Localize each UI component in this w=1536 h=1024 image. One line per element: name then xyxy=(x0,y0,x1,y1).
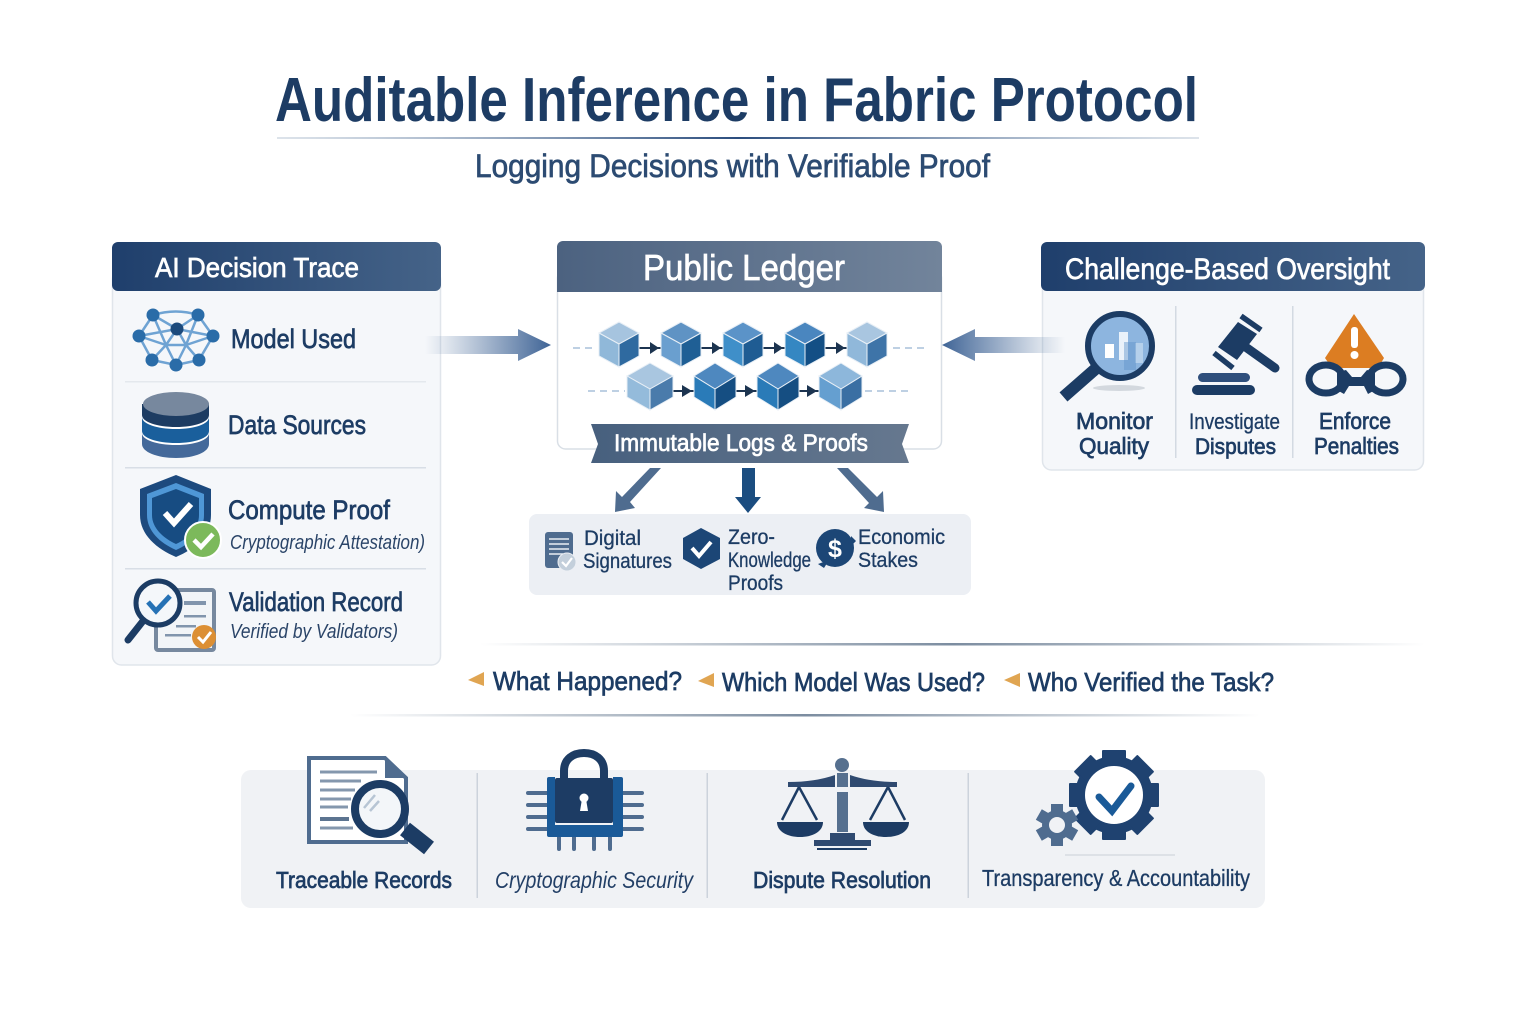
chain: blocks row two xyxy=(588,363,912,410)
panel: Challenge-Based Oversight xyxy=(1041,242,1425,470)
icon: zero-knowledge hexagon xyxy=(683,528,720,569)
label: Compute Proof: Compute Proof xyxy=(228,495,390,525)
icon: question marker one xyxy=(468,672,484,686)
banner: Immutable Logs & Proofs xyxy=(591,424,909,463)
label: Zero-Knowledge Proofs: Zero- xyxy=(728,526,775,549)
label: Enforce Penalties: Penalties xyxy=(1314,433,1399,459)
label: Economic Stakes: Stakes xyxy=(858,549,918,572)
icon: question marker three xyxy=(1004,673,1020,687)
panel: proof methods xyxy=(529,514,971,595)
icon: traceable records xyxy=(309,756,429,848)
icon: gears with check xyxy=(1036,751,1175,856)
icon: neural network xyxy=(132,308,220,372)
questions row xyxy=(468,666,1274,697)
arrow: ledger to economic stakes xyxy=(837,468,884,512)
label: Monitor Quality: Monitor xyxy=(1076,408,1153,434)
label: Investigate Disputes: Disputes xyxy=(1195,434,1276,459)
label: Zero-Knowledge Proofs: Knowledge xyxy=(728,549,811,572)
label: Monitor Quality: Quality xyxy=(1079,433,1149,459)
heading: AI Decision Trace xyxy=(112,242,441,291)
note: Verified by Validators: Verified by Validators) xyxy=(230,621,398,643)
subtitle: Logging Decisions with Verifiable Proof xyxy=(475,148,990,184)
label: Transparency & Accountability: Transparency & Accountability xyxy=(982,865,1250,891)
heading: Public Ledger: Public Ledger xyxy=(643,247,845,288)
arrow: trace to ledger xyxy=(425,329,551,361)
label: Digital Signatures: Digital xyxy=(584,527,641,550)
panel: Public Ledger xyxy=(557,241,942,463)
icon: database xyxy=(142,392,209,458)
icon: validation record xyxy=(128,581,216,650)
label: Data Sources: Data Sources xyxy=(228,410,366,440)
note: Cryptographic Attestation: Cryptographic Attestation) xyxy=(230,532,425,554)
arrow: oversight to ledger xyxy=(942,329,1065,361)
icon: shield with check xyxy=(140,475,221,558)
icon: cryptographic chip lock xyxy=(528,753,642,849)
question: Which Model Was Used: Which Model Was Used? xyxy=(722,667,985,697)
title: Auditable Inference in Fabric Protocol xyxy=(275,66,1198,135)
label: Investigate Disputes: Investigate xyxy=(1189,409,1280,434)
label: Economic Stakes: Economic xyxy=(858,526,945,549)
label: Validation Record: Validation Record xyxy=(229,587,403,617)
heading: Public Ledger xyxy=(557,241,942,292)
label: Digital Signatures: Signatures xyxy=(583,550,672,573)
label: Dispute Resolution: Dispute Resolution xyxy=(753,867,931,893)
heading: Challenge-Based Oversight xyxy=(1041,242,1425,291)
label: Zero-Knowledge Proofs: Proofs xyxy=(728,572,783,595)
chain: blocks row one xyxy=(573,322,925,367)
icon: question marker two xyxy=(698,673,714,687)
heading: Challenge-Based Oversight: Challenge-Based Oversight xyxy=(1065,253,1391,286)
label: Model Used: Model Used xyxy=(231,324,356,354)
label: Traceable Records: Traceable Records xyxy=(276,867,452,893)
banner: Immutable Logs & Proofs: Immutable Logs & Proofs xyxy=(614,430,868,457)
icon: digital signature document xyxy=(545,532,576,571)
icon: scales of justice xyxy=(777,758,909,850)
icon: economic stakes coin xyxy=(816,529,856,568)
icon: warning and handcuffs xyxy=(1309,314,1403,394)
icon: monitor magnifier xyxy=(1068,314,1152,393)
arrow: ledger to zero-knowledge proofs xyxy=(735,468,761,513)
icon: economic stakes coin: $ xyxy=(828,535,842,563)
icon: gavel xyxy=(1192,316,1275,395)
heading: AI Decision Trace: AI Decision Trace xyxy=(155,252,359,283)
panel: outcomes xyxy=(241,751,1265,908)
label: Enforce Penalties: Enforce xyxy=(1319,408,1391,434)
label: Cryptographic Security: Cryptographic Security xyxy=(495,867,694,893)
question: Who Verified the Task: Who Verified the Task? xyxy=(1028,667,1274,697)
question: What Happened: What Happened? xyxy=(493,666,682,696)
panel: AI Decision Trace xyxy=(112,242,441,665)
arrow: ledger to signatures xyxy=(615,468,661,512)
